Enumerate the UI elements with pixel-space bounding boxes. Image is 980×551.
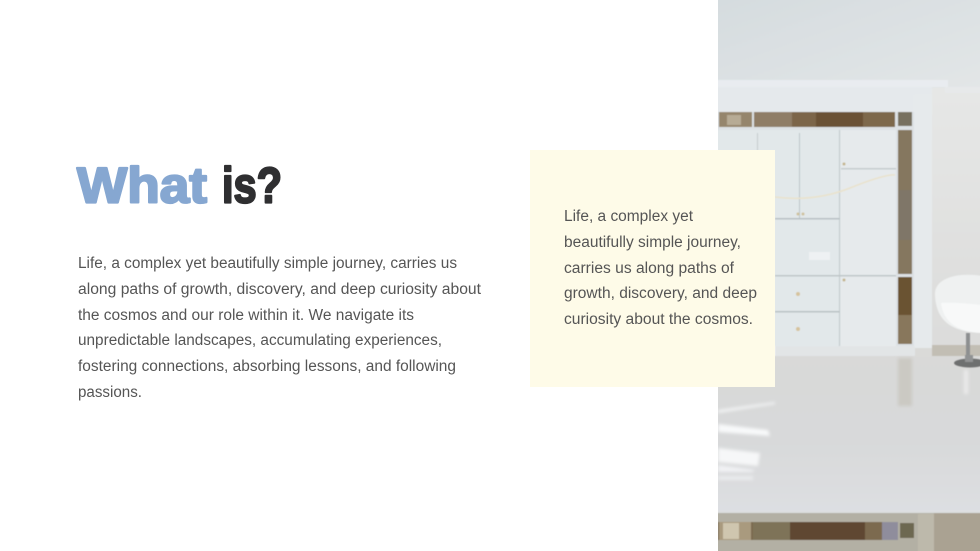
title: is? xyxy=(222,158,282,214)
title: What xyxy=(77,158,207,214)
body text paragraph: unpredictable landscapes, accumulating experiences, xyxy=(78,332,442,349)
callout text: growth, discovery, and deep xyxy=(564,285,757,302)
bottom reflection strip xyxy=(716,511,980,551)
chair xyxy=(935,275,980,368)
body text paragraph: along paths of growth, discovery, and deep curiosity about xyxy=(78,281,482,298)
panel: pale yellow callout xyxy=(530,150,775,387)
callout text: carries us along paths of xyxy=(564,260,735,277)
body text paragraph: Life, a complex yet beautifully simple journey, carries us xyxy=(78,255,457,272)
body text paragraph: fostering connections, absorbing lessons, and following xyxy=(78,358,456,375)
body text paragraph: the cosmos and our role within it. We navigate its xyxy=(78,307,414,324)
title xyxy=(76,158,282,214)
photo: white interior room with cabinets and chair xyxy=(718,0,980,551)
callout text: Life, a complex yet xyxy=(564,208,694,225)
body text paragraph xyxy=(78,255,482,401)
callout text: beautifully simple journey, xyxy=(564,234,741,251)
callout text: curiosity about the cosmos. xyxy=(564,311,753,328)
callout text xyxy=(564,208,757,328)
body text paragraph: passions. xyxy=(78,384,142,401)
